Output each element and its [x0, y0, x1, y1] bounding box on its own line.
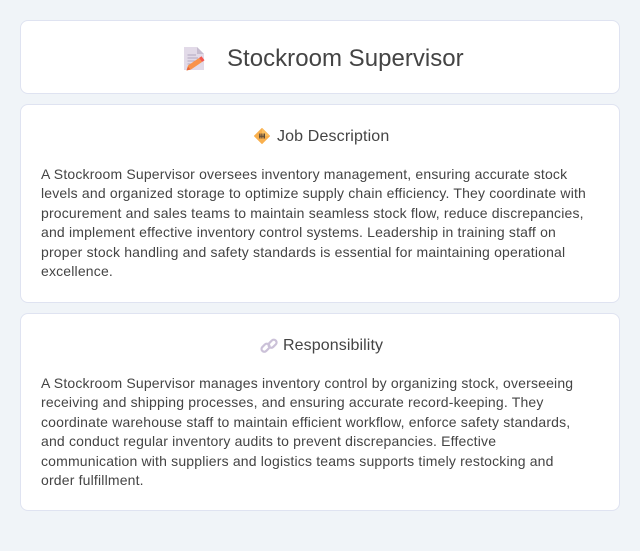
text block: responsibility — [41, 375, 573, 488]
text block: job description: and implement effective inventory control systems. Leadership in training staff on — [41, 224, 556, 240]
icon: chain link — [260, 338, 278, 353]
text block: responsibility: and conduct regular inventory audits to prevent discrepancies. Effective — [41, 433, 496, 449]
icon: document with pencil — [184, 47, 204, 70]
heading: Stockroom Supervisor: Stockroom Supervisor — [227, 45, 464, 72]
text block: job description: levels and organized storage to optimize supply chain efficiency. They coordinate with — [41, 185, 586, 201]
text block: job description: A Stockroom Supervisor oversees inventory management, ensuring accurate stock — [41, 166, 567, 182]
text block: responsibility: A Stockroom Supervisor manages inventory control by organizing stock, overseeing — [41, 375, 573, 391]
text block: job description: excellence. — [41, 263, 113, 279]
heading: Job Description: Job Description — [277, 128, 389, 145]
text block: responsibility: coordinate warehouse staff to maintain efficient workflow, enforce safety standards, — [41, 414, 570, 430]
heading: Responsibility: Responsibility — [283, 337, 383, 354]
text block: responsibility: order fulfillment. — [41, 472, 144, 488]
icon: orange diamond — [254, 128, 270, 144]
text block: job description: procurement and sales teams to maintain seamless stock flow, reduce discrepancies, — [41, 205, 584, 221]
text block: responsibility: communication with suppliers and logistics teams supports timely restocking and — [41, 453, 554, 469]
text block: job description — [41, 166, 586, 279]
panel: job description — [20, 104, 620, 303]
text block: job description: proper stock handling and safety standards is essential for maintaining operational — [41, 244, 565, 260]
panel: title — [20, 20, 620, 94]
panel: responsibility — [20, 313, 620, 511]
text block: responsibility: receiving and shipping processes, and ensuring accurate record-keeping. They — [41, 394, 544, 410]
